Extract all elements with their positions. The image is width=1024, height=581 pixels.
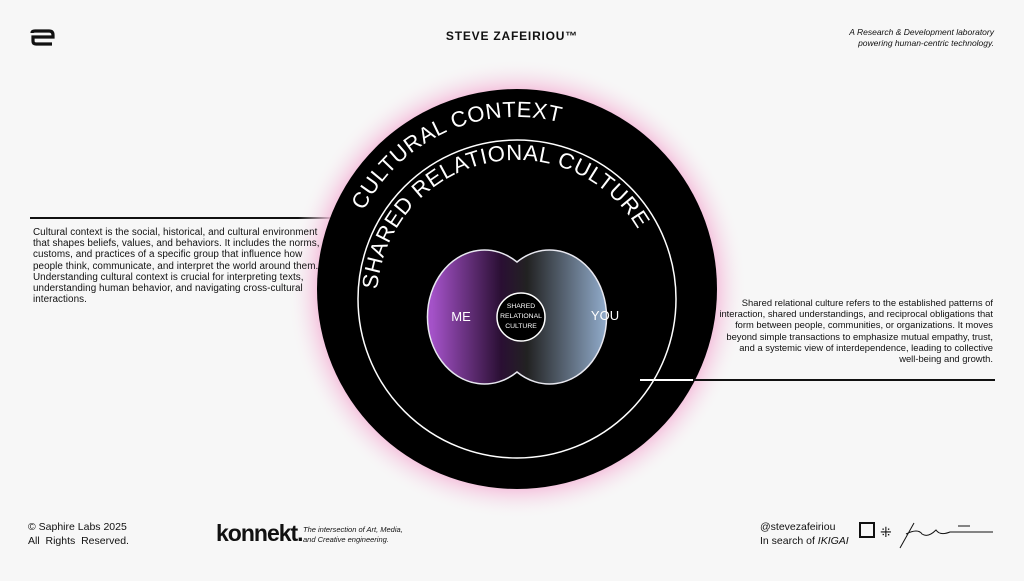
- title: STEVE ZAFEIRIOU™: [446, 29, 578, 43]
- venn diagram: me and you: SHARED: [507, 303, 535, 310]
- venn diagram: me and you: CULTURE: [505, 323, 537, 330]
- left text block: customs, and practices of a specific group that influence how: [33, 249, 302, 260]
- footer copyright: © Saphire Labs 2025: [28, 521, 127, 533]
- inner circle: shared relational culture: SHARED RELATIONAL CULTURE: [362, 144, 650, 288]
- left text block: interactions.: [33, 294, 87, 305]
- tagline: [848, 27, 994, 48]
- left text block: Understanding cultural context is crucial for interpreting texts,: [33, 272, 304, 283]
- venn diagram: me and you: ME: [451, 309, 471, 324]
- venn diagram: me and you: [427, 250, 619, 384]
- tagline: powering human-centric technology.: [858, 38, 994, 48]
- left divider line: [30, 217, 330, 219]
- venn diagram: me and you: RELATIONAL: [500, 313, 542, 320]
- konnekt logo: [216, 520, 403, 546]
- footer handle: @stevezafeiriou: [760, 521, 835, 533]
- konnekt logo: The intersection of Art, Media,: [303, 525, 403, 534]
- left text block: Cultural context is the social, historical, and cultural environment: [33, 227, 317, 238]
- footer copyright: [28, 521, 129, 547]
- venn diagram: me and you: YOU: [591, 308, 619, 323]
- konnekt logo: and Creative engineering.: [303, 535, 389, 544]
- logo icon: [30, 29, 55, 46]
- icons and signature: [859, 522, 993, 548]
- right text block: form between people, communities, or organizations. It moves: [735, 319, 993, 330]
- footer handle: [760, 521, 849, 547]
- left text block: understanding human behavior, and navigating cross-cultural: [33, 283, 303, 294]
- right text block: interaction, shared understandings, and reciprocal obligations that: [719, 308, 993, 319]
- left text block: that shapes beliefs, values, and behaviors. It includes the norms,: [33, 238, 320, 249]
- right text block: beyond simple transactions to emphasize mutual empathy, trust,: [726, 331, 993, 342]
- right divider line: [693, 379, 995, 381]
- right text block: well-being and growth.: [899, 353, 993, 364]
- right text block: Shared relational culture refers to the established patterns of: [742, 297, 993, 308]
- right text block: and a systemic view of interdependence, leading to collective: [739, 342, 993, 353]
- outer circle: cultural context: [317, 89, 717, 489]
- right text block: [719, 297, 993, 364]
- footer copyright: All Rights Reserved.: [28, 535, 129, 547]
- inner circle: shared relational culture: [357, 139, 677, 459]
- left text block: [33, 227, 320, 305]
- icons and signature: ⁜: [880, 524, 892, 540]
- left text block: people think, communicate, and interpret the world around them.: [33, 261, 318, 272]
- tagline: A Research & Development laboratory: [849, 27, 994, 37]
- outer circle: cultural context: CULTURAL CONTEXT: [353, 102, 563, 208]
- footer handle: In search of IKIGAI: [760, 535, 849, 547]
- konnekt logo: konnekt.: [216, 520, 303, 546]
